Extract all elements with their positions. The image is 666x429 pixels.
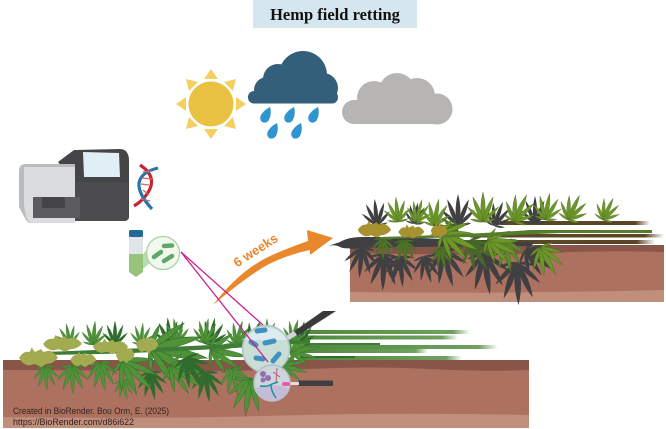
stems: lower [300,330,498,360]
icon: sample tube [129,230,143,277]
attribution text: https://BioRender.com/d86i622 [13,417,134,427]
title [253,0,417,28]
shadow plant [328,194,564,306]
stems: upper [470,221,664,244]
icon: DNA helix [134,165,158,209]
soil: lower [3,360,529,428]
green plant: upper [371,188,625,284]
buds: upper [358,221,448,239]
icon: rain cloud [248,51,338,139]
magenta connector lines [181,252,268,362]
icon: grey cloud [342,73,452,124]
icon: sequencing machine [19,149,129,223]
stem: upper green [380,230,652,239]
arrow: 6 weeks [213,230,333,305]
panel: upper retted field [328,188,664,306]
green plant: lower [32,316,322,418]
buds: lower [19,335,158,367]
title: Hemp field retting [270,5,401,24]
panel: lower fresh field [3,316,529,428]
magnifier: bacteria [242,311,336,372]
soil: upper [350,245,664,302]
attribution text: Created in BioRender. Bou Orm, E. (2025) [13,406,169,416]
icon: sun [176,69,246,139]
arrow: 6 weeks: 6 weeks [231,230,281,270]
magnifier: fungi [254,365,333,401]
stem: lower main [40,340,310,355]
attribution text [13,406,169,427]
icon: bacteria circle [143,236,180,270]
